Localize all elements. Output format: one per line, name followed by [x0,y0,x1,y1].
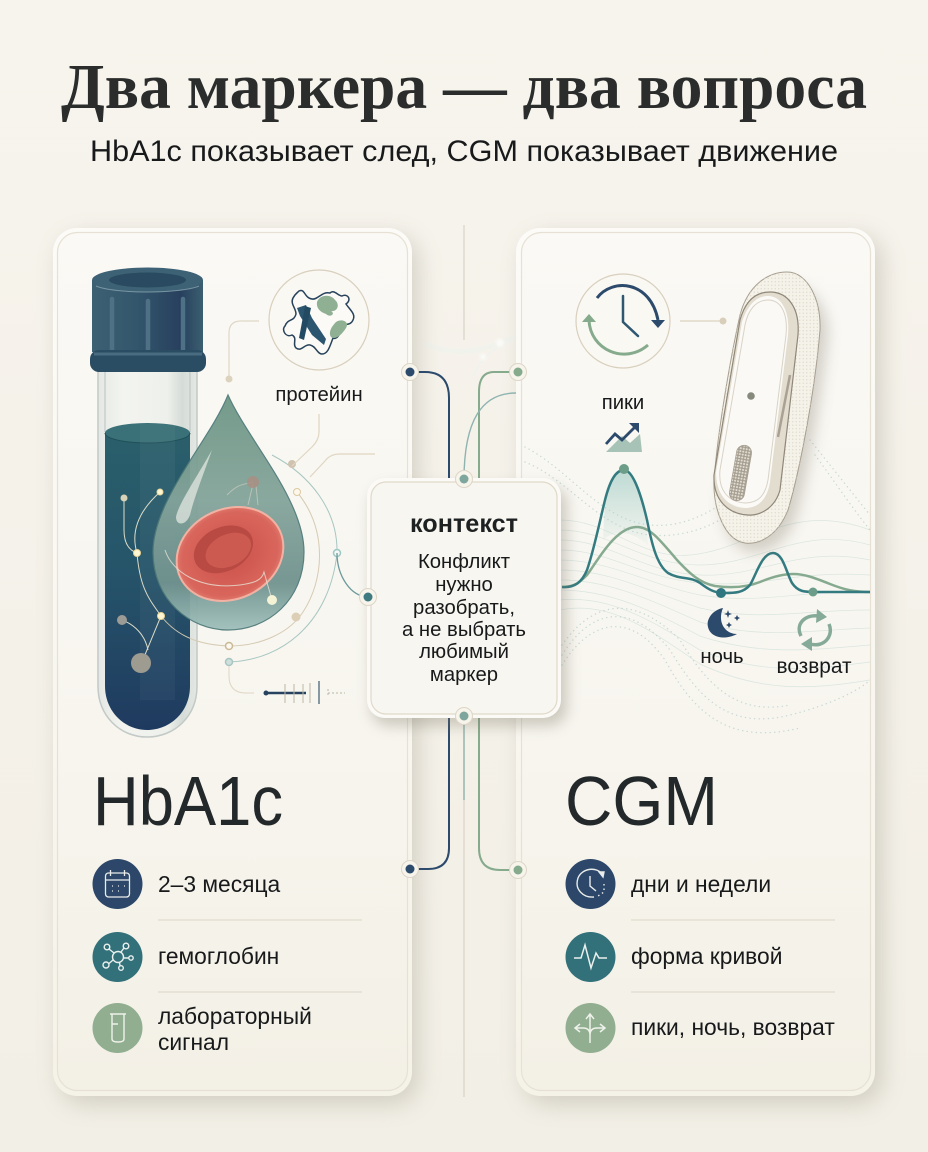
card body: а не выбрать [402,619,526,641]
adhesive patch [714,272,820,543]
row: пики, ночь, возврат: пики, ночь, возврат [631,1014,835,1040]
callout line: clock to sensor [680,318,726,324]
card body: любимый [419,641,509,663]
title: Два маркера — два вопроса [61,51,867,123]
connector nodes [402,364,526,878]
dotted waves [525,440,870,733]
subtitle: HbA1c показывает след, CGM показывает движение [90,135,838,168]
callout dot [226,376,232,382]
icon: cycle [799,609,830,651]
glass tube [98,365,197,737]
panel: HbA1c [53,228,418,1104]
context card [360,470,567,726]
label: возврат: возврат [777,655,852,678]
network lines over tube and drop [122,455,337,662]
chart points [619,464,818,598]
label: ночь: ночь [700,646,744,668]
cap [92,280,203,352]
row: форма кривой [566,932,782,982]
card body: разобрать, [413,597,515,619]
CGM sensor [714,272,828,553]
connector: tube to context [337,553,369,597]
row: гемоглобин: гемоглобин [158,943,279,969]
icon: peaks [606,423,642,452]
callout line: protein [229,321,259,378]
row: пики, ночь, возврат [566,1003,835,1053]
network nodes [117,460,340,673]
center divider line [463,225,465,1097]
label: пики: пики [602,392,644,414]
dividers left [158,920,362,992]
row: гемоглобин [92,932,279,982]
row: лабораторный сигнал: лабораторный [158,1003,312,1029]
CGM curves chart [562,470,870,593]
test tube [90,268,206,737]
card nodes [360,470,472,724]
row: форма кривой: форма кривой [631,943,782,969]
row: 2–3 месяца [92,859,281,909]
card body: Конфликт [418,551,510,573]
row: дни и недели: дни и недели [631,871,771,897]
wave field [560,520,870,687]
sensor body [714,292,798,515]
glow in gap [425,337,515,375]
blood drop [153,395,304,630]
row: лабораторный сигнал: сигнал [158,1029,229,1055]
heading: HbA1c: HbA1c [93,762,283,840]
label: протейин: протейин [275,384,363,406]
card body [402,551,526,686]
row: дни и недели [566,859,771,909]
callout lines: drop [292,414,375,477]
panel: CGM [516,228,882,1104]
row: лабораторный сигнал [92,1003,312,1055]
row: 2–3 месяца: 2–3 месяца [158,871,281,897]
protein icon [269,270,369,370]
icon: moon [708,608,740,638]
connectors: lower [411,716,516,870]
dividers right [631,920,835,992]
red blood cell [161,490,299,618]
connectors: upper [411,372,516,480]
card heading: контекст [410,510,518,538]
clock icon [576,274,670,368]
card body: нужно [435,574,493,596]
card body: маркер [430,664,498,686]
scale glyph [229,666,345,704]
heading: CGM: CGM [565,762,718,840]
